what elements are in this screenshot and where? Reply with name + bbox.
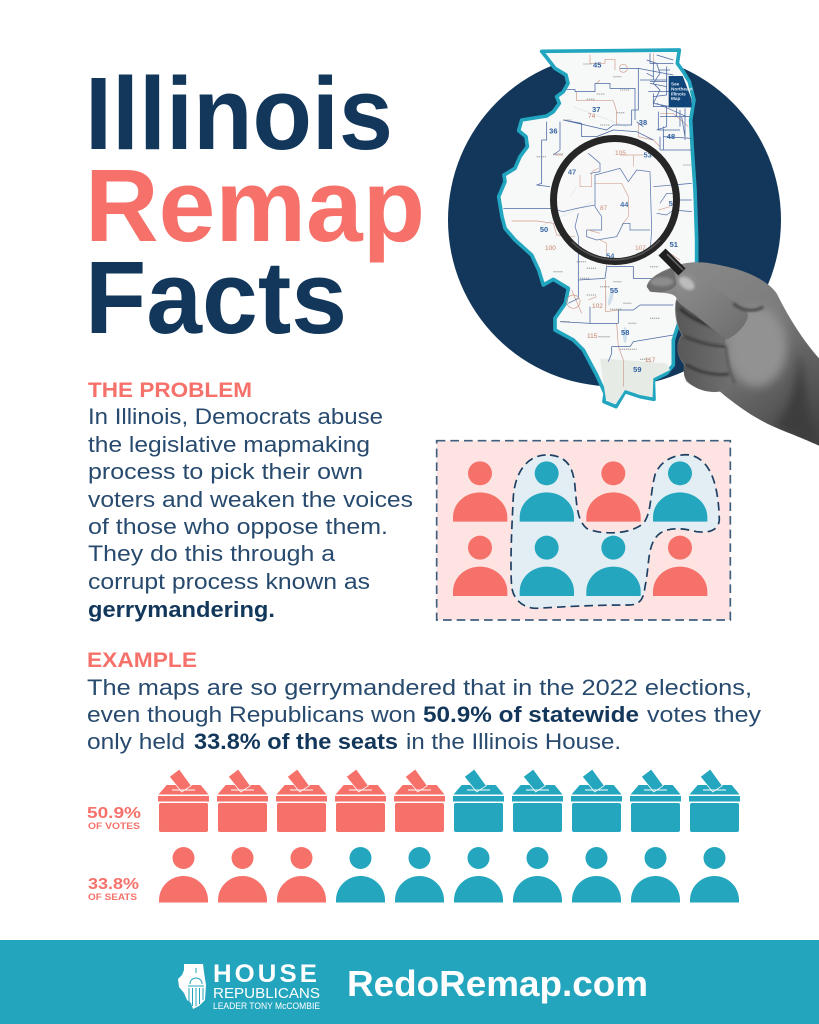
map of Illinois with district lines: 58 [621,328,629,337]
navy circle backdrop [448,54,781,386]
illustration: Illinois map under magnifying glass [448,50,819,450]
text block: example: The maps are so gerrymandered that in the 2022 elections, [87,675,752,700]
map of Illinois with district lines: 74 [588,113,596,120]
text block: example: in the Illinois House. [406,729,621,754]
teal voters [520,461,707,596]
text block: example [87,675,761,754]
text block: example: votes they [647,702,761,727]
text block: the problem: the legislative mapmaking [88,432,370,457]
text block: the problem: voters and weaken the voices [88,487,413,512]
text block: example: 50.9% of statewide [423,702,639,727]
chart: votes pictogram row [87,769,740,832]
seats label: 33.8% [88,876,139,893]
icon: Illinois with capitol [178,964,206,1009]
coral ballot boxes [158,769,445,832]
text block: the problem: They do this through a [88,541,336,566]
seats label: OF SEATS [88,892,137,902]
inset label: northeast map: See [671,82,680,87]
votes label [87,805,141,831]
magnifying glass lens [554,138,676,262]
magnifier handle [662,252,683,272]
text block: the problem [88,404,413,622]
title: Illinois [85,56,393,171]
map of Illinois with district lines: 102 [592,303,603,310]
inset label: northeast map [669,76,693,107]
chart: seats pictogram row [88,847,739,902]
website URL: RedoRemap.com [347,963,648,1004]
diagram: gerrymandered district [437,441,730,620]
text block: the problem: process to pick their own [88,459,363,484]
hand holding the magnifier [647,262,819,450]
map of Illinois with district lines: 105 [615,150,626,157]
coral seats [159,847,326,902]
votes label: OF VOTES [88,821,140,831]
text block: the problem: In Illinois, Democrats abuse [88,404,383,429]
dashed gerrymandered blob [511,455,719,608]
inset label: northeast map: Northeast [671,87,693,92]
map of Illinois with district lines: 54 [606,251,615,260]
text block: example: only held [87,729,185,754]
text block: the problem: corrupt process known as [88,569,370,594]
dashed pink district frame [437,441,730,620]
teal ballot boxes [453,769,740,832]
map of Illinois with district lines: 51 [670,240,678,249]
title: Facts [85,240,347,355]
map of Illinois with district lines: 52 [669,199,677,208]
logo: House Republicans: REPUBLICANS [213,986,320,1002]
inset label: northeast map: Illinois [671,91,686,96]
map of Illinois with district lines: 47 [568,167,576,176]
logo: House Republicans: HOUSE [213,960,320,988]
logo: House Republicans [178,960,320,1011]
text block: the problem: gerrymandering. [88,597,275,622]
map of Illinois with district lines: 48 [667,132,675,141]
text block: example: 33.8% of the seats [194,729,398,754]
footer band [0,940,819,1024]
map of Illinois with district lines: 107 [635,245,646,252]
map of Illinois with district lines: 59 [633,365,641,374]
map of Illinois with district lines: 100 [545,245,556,252]
map of Illinois with district lines: 38 [639,118,647,127]
inset label: northeast map: Map [671,96,680,101]
thumb [695,308,748,340]
map of Illinois with district lines: 44 [620,200,629,209]
title: Remap [85,148,425,263]
map of Illinois with district lines: 45 [593,61,601,70]
map of Illinois with district lines: 115 [587,333,598,340]
title [85,56,425,355]
votes label: 50.9% [87,805,141,822]
text block: example: even though Republicans won [87,702,416,727]
seats label [88,876,139,902]
map of Illinois with district lines: 50 [540,225,548,234]
text block: the problem: of those who oppose them. [88,514,388,539]
index fingertip [647,268,677,292]
map of Illinois with district lines: 37 [592,105,600,114]
map of Illinois with district lines: 36 [549,126,557,135]
heading: example: EXAMPLE [87,649,197,672]
map of Illinois with district lines: 53 [643,151,652,160]
map of Illinois with district lines: 117 [645,357,656,364]
heading: the problem: THE PROBLEM [88,379,252,402]
coral voters [453,461,707,596]
logo: House Republicans: LEADER TONY McCOMBIE [213,1001,320,1011]
map of Illinois with district lines: 87 [600,205,608,212]
map of Illinois with district lines: 55 [610,286,618,295]
map of Illinois with district lines [499,50,697,407]
fingers [676,300,727,344]
teal seats [336,847,739,902]
